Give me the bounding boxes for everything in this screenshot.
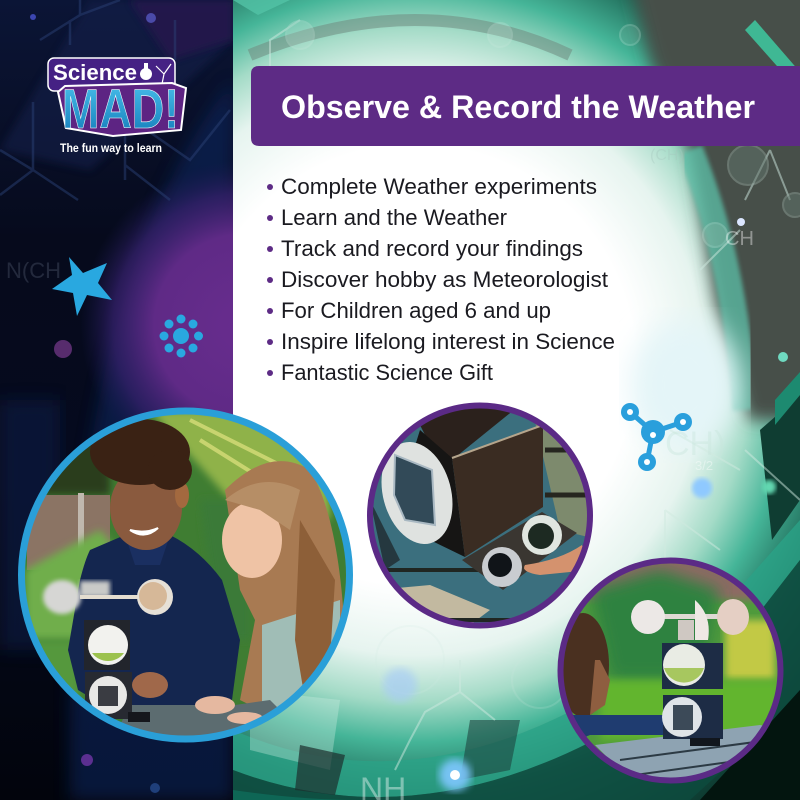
faint formula labels: 3/2 [695, 458, 713, 473]
wind meter [43, 579, 173, 722]
bullet list: Discover hobby as Meteorologist [281, 267, 609, 292]
hexagon line pattern [0, 0, 230, 200]
table [122, 700, 277, 736]
bullet list: Track and record your findings [281, 236, 583, 261]
weather station box [371, 405, 543, 557]
panel: left purple and navy background [0, 0, 233, 800]
panel: right glowing background [233, 0, 800, 800]
faint formula labels: CH [725, 228, 754, 250]
boy head and arm [564, 613, 663, 736]
faint formula labels: CH) [665, 425, 725, 463]
logo MAD wordmark: MAD! [62, 77, 179, 140]
glowing nodes [383, 218, 788, 791]
anemometer [631, 599, 749, 746]
faint formula labels: (CH) [650, 147, 684, 164]
logo banner: Science [53, 60, 137, 85]
bullet markers [267, 184, 273, 376]
faint formula labels [360, 147, 754, 800]
girl [222, 461, 345, 720]
boy [68, 419, 240, 715]
photo circle: children with weather station [15, 405, 355, 745]
formula label N(CH: N(CH [6, 258, 61, 283]
bullet list: Complete Weather experiments [281, 174, 597, 199]
heading: Observe & Record the Weather [281, 89, 755, 125]
photo circle: compass close-up [365, 400, 600, 640]
logo tagline: The fun way to learn [60, 141, 162, 155]
faint chemical structures [270, 20, 800, 770]
bullet list [267, 174, 615, 385]
icon: blue star [52, 257, 112, 316]
title bar [251, 66, 800, 146]
logo: Science Mad [48, 58, 186, 155]
bullet list: Inspire lifelong interest in Science [281, 329, 615, 354]
table top [595, 725, 762, 778]
glow dots in left panel [30, 13, 160, 793]
bullet list: Fantastic Science Gift [281, 360, 494, 385]
photo circle: boy and weather station on table [555, 555, 785, 790]
compass plate [462, 512, 590, 590]
bullet list: For Children aged 6 and up [281, 298, 551, 323]
icon: dot cluster [160, 314, 203, 358]
bullet list: Learn and the Weather [281, 205, 507, 230]
icon: molecule [621, 403, 692, 471]
